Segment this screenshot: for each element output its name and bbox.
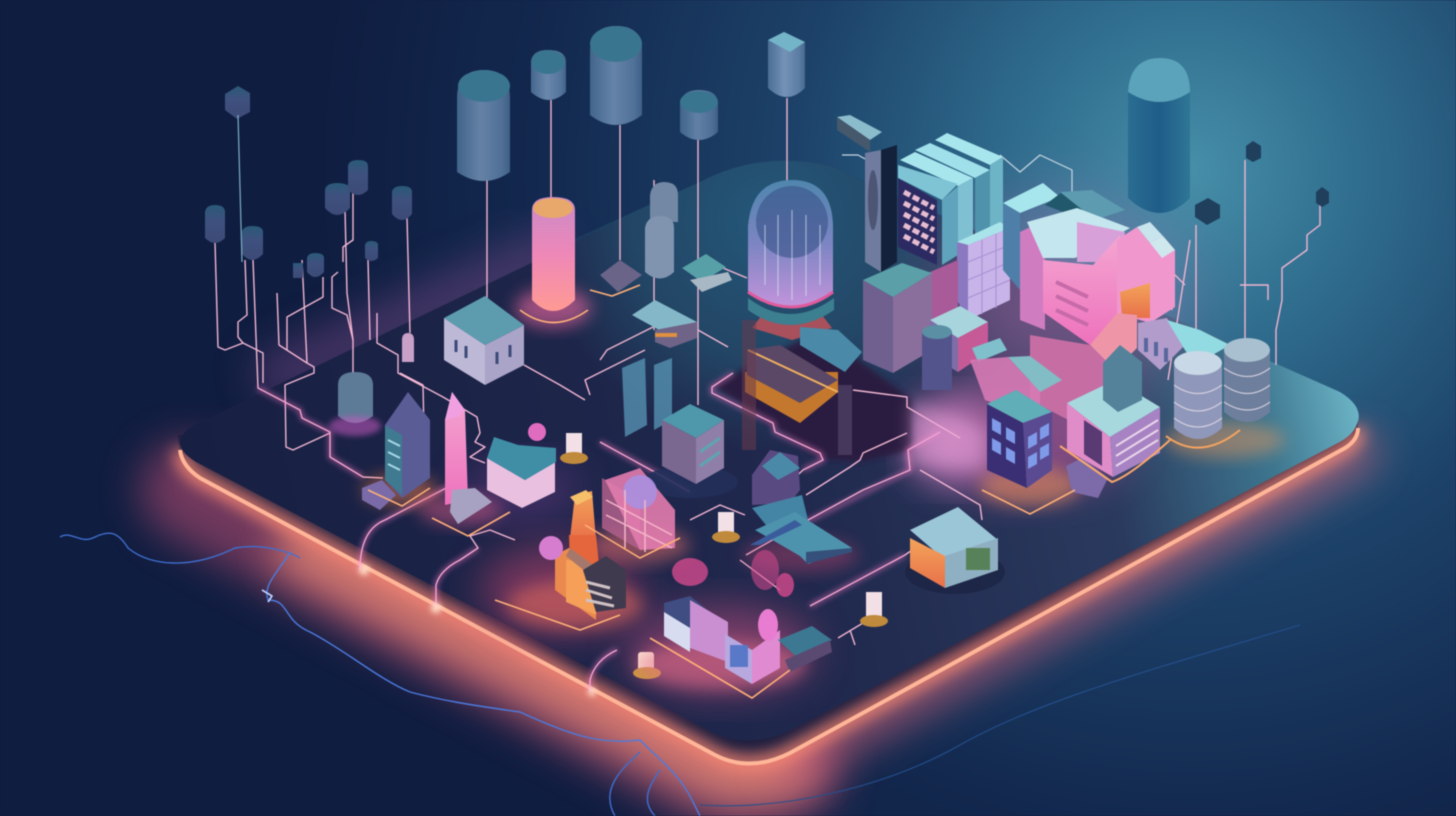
pod 3 (590, 26, 642, 125)
storage tanks (1165, 338, 1285, 458)
small pads near cylinder (600, 254, 732, 348)
pink obelisk (418, 392, 502, 526)
circuit wires on the platform and rising to the left sensors (215, 98, 1320, 692)
warm lit hut (905, 507, 1005, 594)
platform top surface (180, 161, 1359, 741)
small cylinder block (922, 332, 952, 390)
main pink wall (1043, 235, 1120, 345)
city cluster, back row (837, 115, 1125, 320)
right sensors (1195, 141, 1329, 225)
brick building (893, 273, 932, 373)
low block (972, 338, 1007, 362)
lower pink fill (1030, 335, 1115, 435)
orange glow window (1120, 283, 1150, 318)
pink low-rise with tiered top (1060, 345, 1170, 482)
pods on stems near dome (645, 182, 678, 278)
teal back portion of platform (440, 161, 1100, 480)
floor glow beneath platform (190, 452, 1360, 781)
pod 1 (457, 70, 510, 181)
gable wing (1117, 227, 1175, 323)
brick pink side (1020, 220, 1045, 330)
mid-right row behind cylinders (1138, 318, 1230, 370)
tower grey side (865, 150, 881, 272)
rear slab 3 (915, 143, 990, 178)
tower dark side (881, 145, 897, 272)
upper roof (1027, 208, 1130, 258)
pod caps (458, 26, 805, 113)
pink house with teal roof (487, 423, 556, 508)
orange circuit traces around buildings (368, 285, 1075, 698)
small lantern markers (560, 433, 888, 679)
wires glow (258, 373, 940, 692)
warm glow pools on platform (460, 210, 1180, 695)
pod 6 cap (1128, 58, 1190, 102)
pod 5 (768, 32, 805, 97)
tank right (1224, 340, 1270, 422)
translucent pink passage (910, 400, 987, 470)
small left sensors (205, 86, 412, 278)
orange tower group (507, 490, 643, 629)
window face (898, 178, 937, 265)
tower sign top (837, 115, 882, 140)
pod 4 (680, 90, 718, 140)
pod 2 (531, 50, 566, 100)
city cluster, textured mid buildings (863, 260, 1062, 470)
platform rim highlight (180, 428, 1358, 764)
lavender block (957, 222, 1010, 245)
platform rim glow (180, 428, 1358, 764)
rear slab 2 (900, 152, 973, 186)
blue-window office block (980, 390, 1108, 506)
glowing magenta blobs (672, 550, 794, 597)
arched teal house and bar (742, 450, 858, 573)
pod 6, large (1128, 58, 1190, 213)
electric blue cracks on the floor (60, 533, 1300, 816)
floating pods (205, 26, 1329, 278)
pink glass building (590, 468, 690, 563)
magenta wall (930, 260, 958, 365)
upper wall (1077, 222, 1125, 262)
platform side edge (178, 410, 1358, 764)
bright flares on the rim (359, 565, 596, 696)
rear slab 1 (898, 165, 958, 200)
rear slab 4 (935, 133, 1003, 165)
purple haze behind back-left platform edge (260, 250, 560, 385)
orange hall under dome (742, 320, 862, 455)
glass twin block with teal top (622, 358, 738, 498)
city cluster, pink core (1020, 208, 1175, 435)
left glass tower and tank (329, 333, 438, 510)
bottom civic building (635, 596, 832, 689)
roofed block (930, 306, 988, 338)
glass dome (748, 180, 834, 340)
tank left (1174, 355, 1222, 439)
pink glowing cylinder (515, 197, 591, 328)
peach foot (1090, 313, 1137, 370)
teal roofed building (1003, 183, 1060, 213)
isometric house with teal roof (444, 296, 524, 385)
dark recessed yard around orange hall (713, 330, 912, 462)
